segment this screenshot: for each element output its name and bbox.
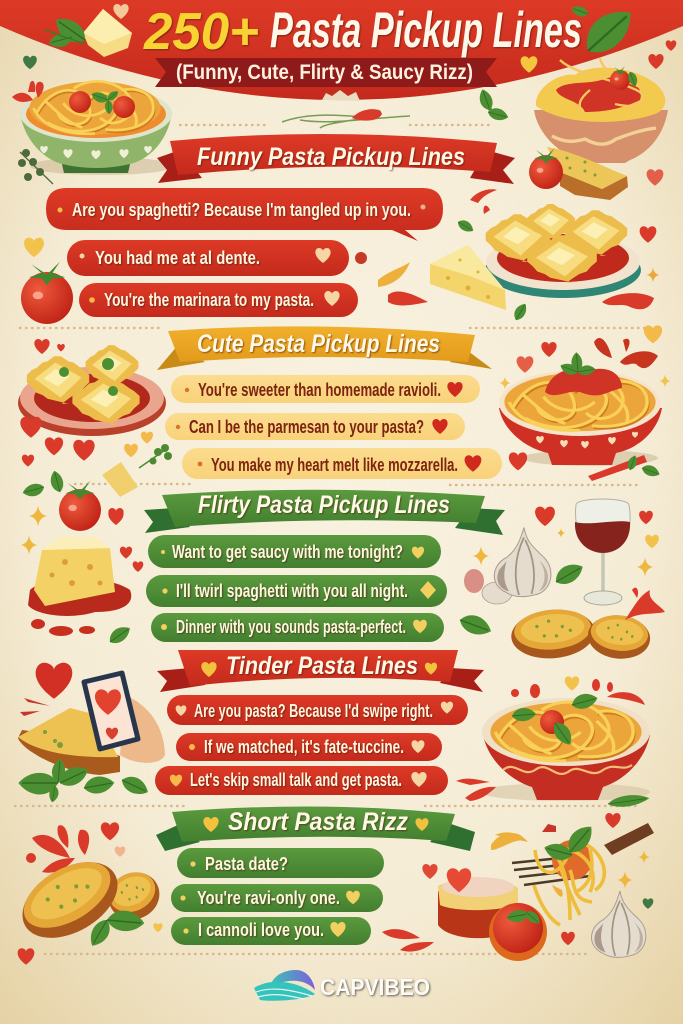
cute line 2 [165,413,465,440]
flirty line 2: I'll twirl spaghetti with you all night. [176,581,408,601]
banner: flirty [144,490,505,535]
icon: garlic bread, short section left [9,847,167,953]
icon: butter cube and leaves, header [45,0,676,73]
title [143,2,582,61]
flirty line 2 [146,575,447,607]
tinder line 3 [155,766,448,795]
flirty line 3 [151,613,444,642]
logo: Capvibeo: CAPVIBEO [320,974,430,1000]
cute line 2: Can I be the parmesan to your pasta? [189,417,424,437]
logo: Capvibeo [254,970,430,1001]
tinder line 1: Are you pasta? Because I'd swipe right. [194,701,433,721]
funny line 3: You're the marinara to my pasta. [104,290,314,310]
icon: parsley and hearts left of bowl [12,56,53,184]
icon: hearts and tomato, cute section left [20,339,172,531]
funny line 3 [79,283,358,317]
icon: ravioli plate left [18,345,166,436]
icon: basil sprig [18,758,151,803]
short line 3: I cannoli love you. [198,920,324,940]
cute line 1: You're sweeter than homemade ravioli. [198,380,441,400]
banner: funny: Funny Pasta Pickup Lines [197,143,465,171]
icon: terracotta bowl top right [534,58,668,163]
banner: funny [157,134,515,184]
icon: cheese wedge right [430,245,506,310]
funny line 2 [67,240,349,276]
flirty line 1 [148,535,441,568]
short line 3 [171,917,371,945]
tinder line 2 [176,733,442,761]
icon: fork with spaghetti [491,821,654,925]
cute line 1 [171,375,480,403]
title: 250+ [143,3,259,61]
icon: decorative hearts and splashes, funny section [24,54,664,322]
banner: short [156,806,475,851]
icon: splash and hearts, short section left [18,822,163,965]
tinder line 1 [167,695,468,725]
banner: cute: Cute Pasta Pickup Lines [197,330,440,358]
short line 2 [171,884,383,912]
flirty line 1: Want to get saucy with me tonight? [172,542,403,562]
banner: flirty: Flirty Pasta Pickup Lines [198,491,450,519]
banner: cute [157,326,492,370]
tinder line 2: If we matched, it's fate-tuccine. [204,737,404,757]
icon: tinder section splashes and hearts [456,676,650,809]
icon: green bowl of spaghetti [20,81,174,175]
flirty line 3: Dinner with you sounds pasta-perfect. [176,617,406,637]
banner: short: Short Pasta Rizz [228,808,408,836]
icon: ravioli plate right [485,204,641,298]
banner: tinder: Tinder Pasta Lines [226,652,418,680]
funny line 1 [46,188,443,241]
icon: red bowl of spaghetti, tinder section [480,691,650,801]
icon: wine glass [575,499,630,605]
icon: red bowl of spaghetti, cute section right [499,352,662,481]
cute line 3: You make my heart melt like mozzarella. [211,455,458,475]
icon: basil sprig under header [282,87,510,128]
divider dots [15,125,650,954]
short line 1 [177,848,384,878]
icon: jar, tomato and garlic [382,813,653,961]
banner: tinder [157,650,484,692]
short line 1: Pasta date? [205,854,288,874]
icon: tomato and garlic bread right [529,147,628,200]
icon: hearts and splash, cute section right [499,325,671,470]
subtitle ribbon: (Funny, Cute, Flirty & Saucy Rizz) [176,61,473,84]
icon: tomato left [21,262,73,324]
header arc [0,0,683,101]
icon: garlic [457,528,587,639]
tinder line 3: Let's skip small talk and get pasta. [190,770,402,790]
icon: garlic bread, flirty section right [509,606,652,662]
icon: cheese block with sauce [21,508,143,647]
funny line 1: Are you spaghetti? Because I'm tangled up in you. [72,200,411,220]
icon: heart, phone and garlic bread [18,663,165,775]
icon: hearts and stars, flirty section right [473,507,665,620]
cute line 3 [182,448,502,479]
short line 2: You're ravi-only one. [197,888,340,908]
funny line 2: You had me at al dente. [95,248,260,268]
